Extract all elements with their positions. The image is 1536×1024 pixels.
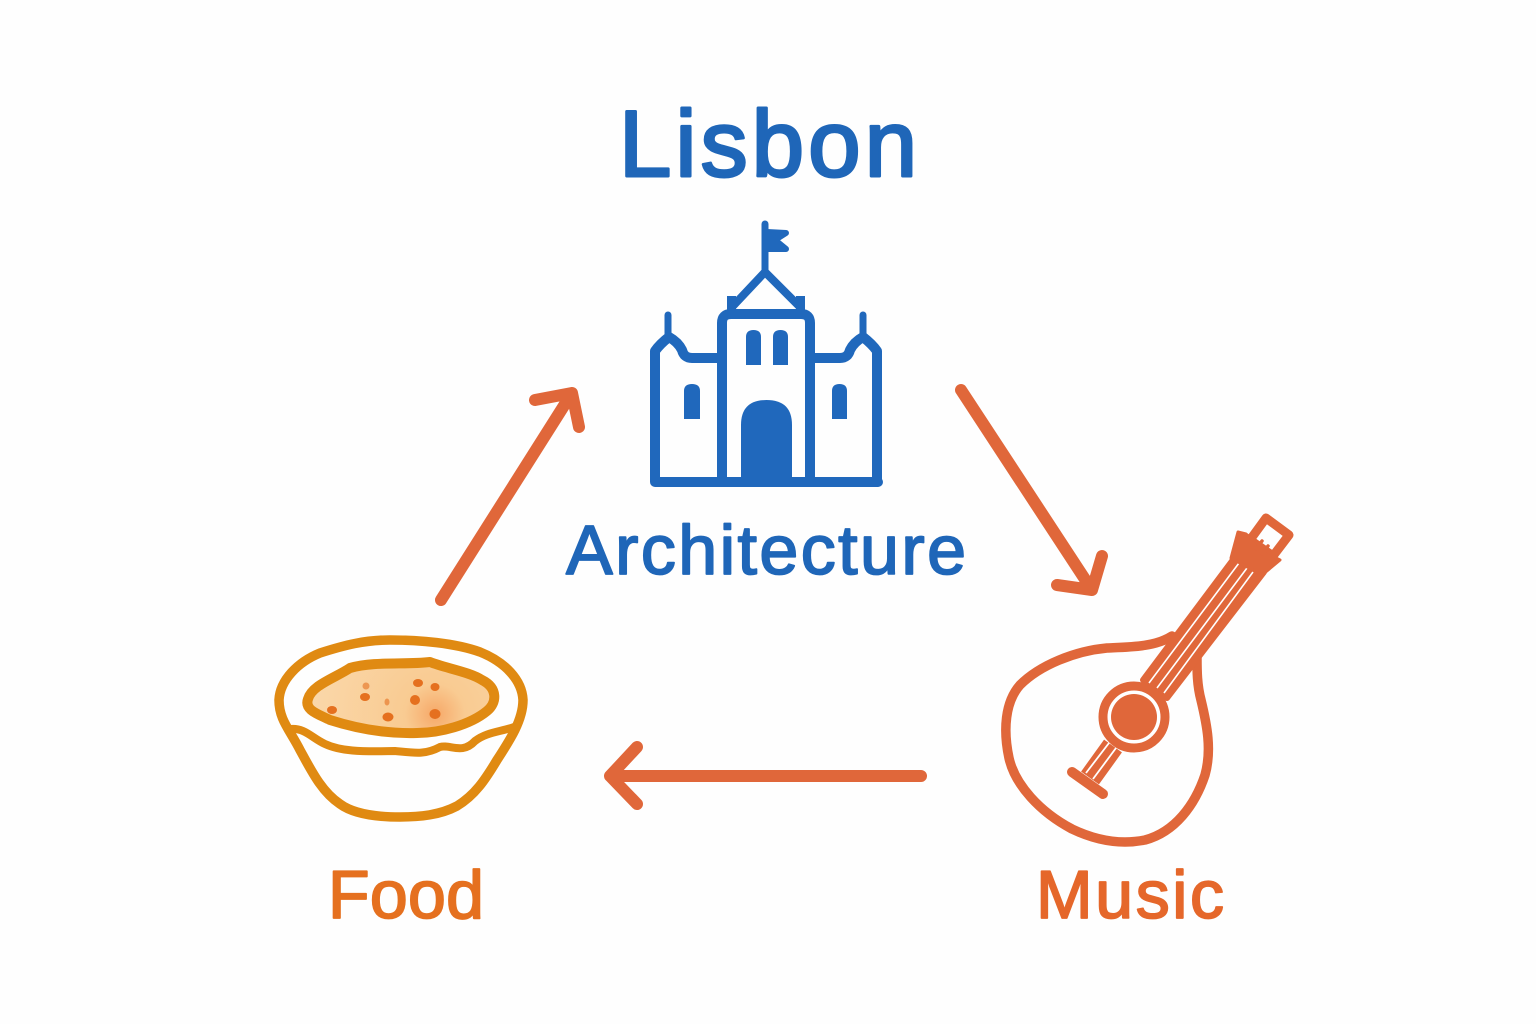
label: music: Music (1036, 857, 1224, 933)
roof (733, 272, 799, 306)
headstock (1250, 518, 1289, 556)
neck (1143, 553, 1264, 698)
right wing (860, 315, 866, 338)
label: architecture: Architecture (566, 511, 966, 589)
flag (762, 224, 768, 270)
arrow: architecture to music (961, 390, 1102, 590)
wing windows (684, 384, 847, 419)
crust edge (291, 727, 514, 753)
icon: custard tart (279, 640, 523, 817)
tower windows (746, 330, 788, 365)
title: Lisbon (619, 91, 917, 196)
neck strings (1149, 563, 1253, 693)
icon: guitar (1006, 518, 1289, 842)
sound hole (1103, 686, 1165, 748)
tart shell (279, 640, 523, 817)
body (1006, 636, 1208, 842)
custard filling (307, 662, 494, 733)
custard spots (327, 679, 440, 722)
bridge (1072, 772, 1103, 794)
arrow: music to food (610, 747, 921, 804)
left wing (664, 315, 672, 338)
central tower (722, 314, 810, 482)
headstock pegs (1231, 532, 1280, 575)
door (741, 400, 792, 483)
lower strings (1090, 746, 1113, 778)
label: food: Food (328, 857, 484, 933)
arrow: food to architecture (441, 393, 579, 600)
icon: castle (655, 224, 878, 483)
